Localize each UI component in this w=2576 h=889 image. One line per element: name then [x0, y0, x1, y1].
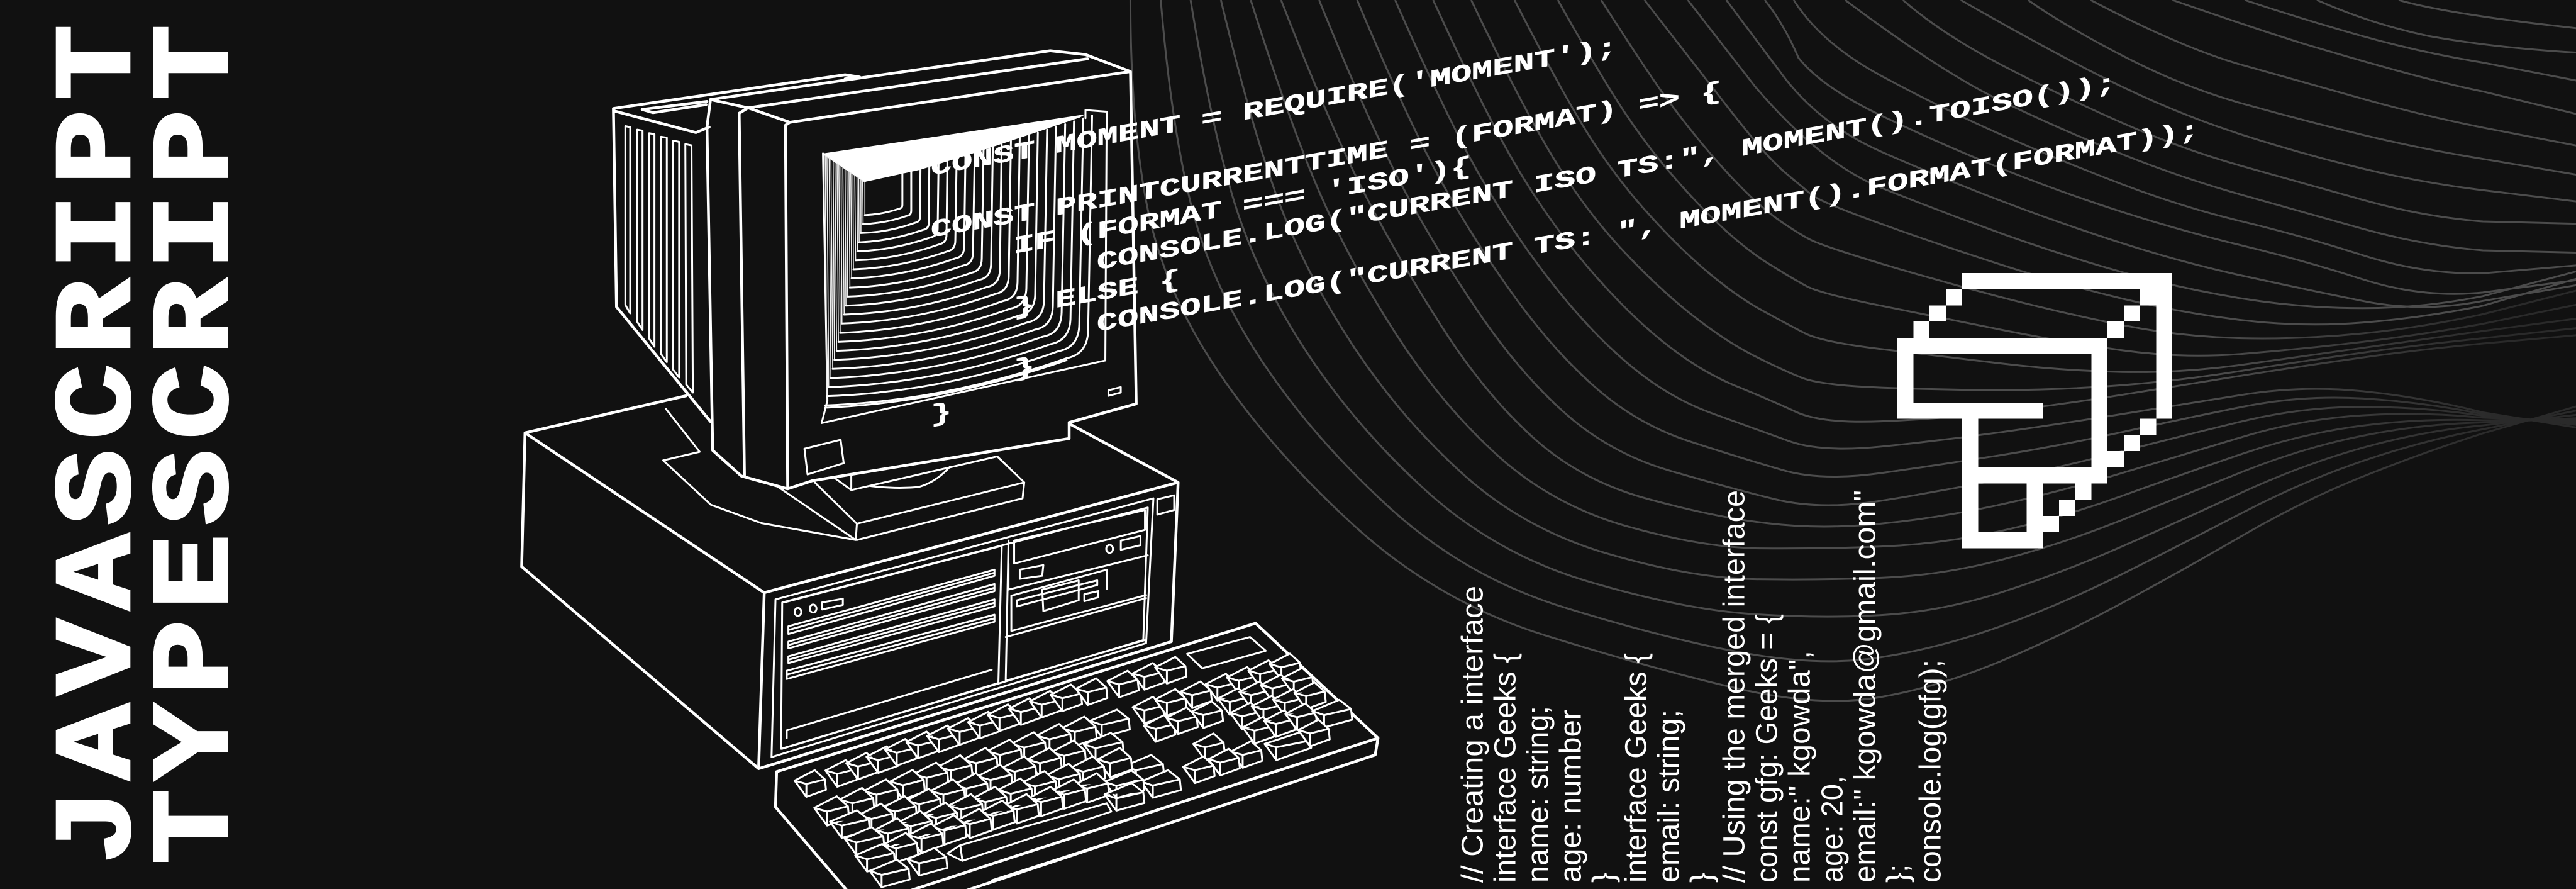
icon: pixel TypeScript folded-page logo [1897, 273, 2172, 548]
code snippet: vertical TypeScript interface text: // Creating a interface [1457, 586, 1489, 883]
code snippet: skewed pixel-style JavaScript text [931, 0, 2199, 430]
code snippet: vertical TypeScript interface text: // Using the merged interface [1718, 490, 1751, 883]
code snippet: skewed pixel-style JavaScript text: } [1014, 354, 1035, 384]
code snippet: skewed pixel-style JavaScript text: CONSOLE.LOG("CURRENT ISO TS:", MOMENT().TOISO()); [1097, 70, 2116, 277]
left drive bay slots [787, 569, 994, 679]
code snippet: vertical TypeScript interface text: age: number [1555, 710, 1587, 883]
illustration: CRT monitor [613, 51, 1136, 489]
code snippet: vertical TypeScript interface text: } [1587, 873, 1620, 883]
code snippet: vertical TypeScript interface text: email: string; [1653, 710, 1685, 883]
code snippet: vertical TypeScript interface text: }; [1882, 864, 1914, 883]
ventilation slots [625, 126, 693, 393]
monitor back housing [613, 75, 860, 422]
code snippet: vertical TypeScript interface text: age: 20, [1816, 776, 1849, 883]
title: JAVASCRIPT vertical heading: JAVASCRIPT [38, 25, 162, 864]
power buttons [822, 599, 843, 610]
code snippet: skewed pixel-style JavaScript text: CONST MOMENT = REQUIRE('MOMENT'); [931, 34, 1618, 182]
code snippet: vertical TypeScript interface text [1457, 490, 1947, 883]
code snippet: vertical TypeScript interface text: interface Geeks { [1620, 653, 1653, 883]
code snippet: vertical TypeScript interface text: } [1685, 873, 1718, 883]
power indicator [1108, 387, 1121, 396]
code snippet: vertical TypeScript interface text: interface Geeks { [1489, 653, 1522, 883]
code snippet: vertical TypeScript interface text: const gfg: Geeks = { [1751, 614, 1784, 883]
illustration: desktop case [521, 396, 1178, 769]
code snippet: vertical TypeScript interface text: name:" kgowda", [1784, 651, 1816, 883]
code snippet: skewed pixel-style JavaScript text: IF (FORMAT === 'ISO'){ [1014, 153, 1472, 261]
screen bezel [821, 110, 1107, 423]
screen left vertical fine lines [825, 155, 865, 396]
screen concentric arcs [825, 116, 1092, 408]
code snippet: skewed pixel-style JavaScript text: } [931, 399, 952, 430]
front button [804, 440, 844, 474]
code snippet: vertical TypeScript interface text: email:" kgowda@gmail.com" [1849, 490, 1882, 883]
case front frame [772, 498, 1153, 757]
title: TYPESCRIPT vertical heading: TYPESCRIPT [136, 25, 259, 864]
code snippet: skewed pixel-style JavaScript text: CONSOLE.LOG("CURRENT TS: ", MOMENT().FORMAT(FORMAT)); [1097, 117, 2199, 338]
monitor shadow on top of case [663, 409, 1024, 540]
code snippet: vertical TypeScript interface text: console.log(gfg); [1914, 659, 1947, 883]
code snippet: skewed pixel-style JavaScript text: } ELSE { [1014, 266, 1180, 323]
small square on case [1157, 495, 1174, 515]
code snippet: skewed pixel-style JavaScript text: CONST PRINTCURRENTTIME = (FORMAT) => { [931, 78, 1721, 245]
background: flowing wave lines [1130, 0, 2576, 701]
right drive bays [1006, 510, 1148, 637]
code snippet: vertical TypeScript interface text: name: string; [1522, 706, 1555, 883]
screen wedge [823, 115, 1085, 182]
illustration: keyboard [775, 623, 1378, 889]
monitor body [707, 51, 1136, 489]
